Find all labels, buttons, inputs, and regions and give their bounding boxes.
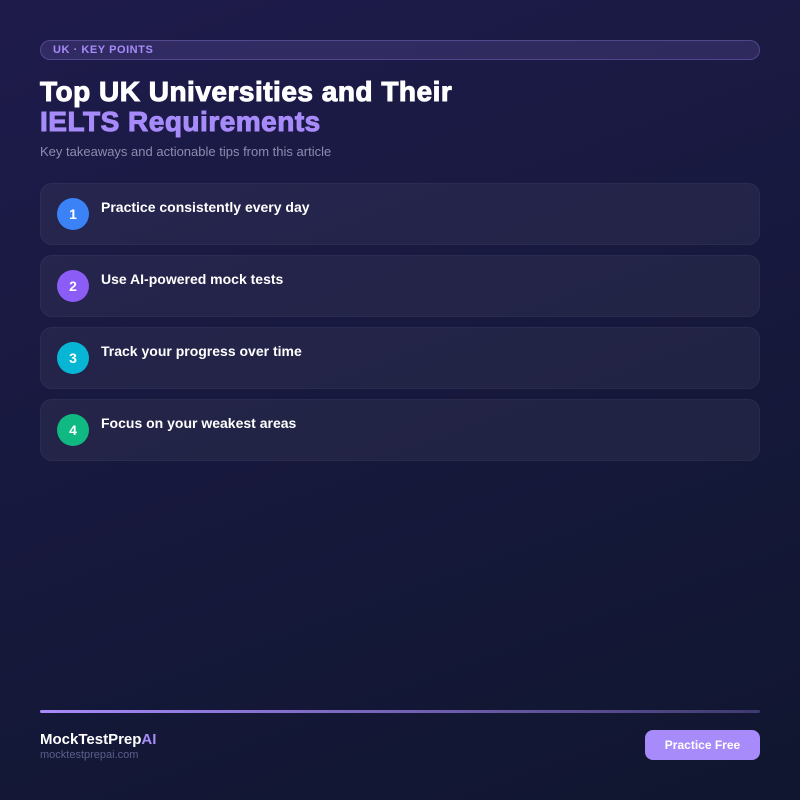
footer accent bar xyxy=(40,710,760,713)
footer brand xyxy=(40,731,156,761)
badge: UK key points: UK · KEY POINTS xyxy=(53,44,153,56)
card: point 1 xyxy=(40,183,760,245)
number badge 3: 3 xyxy=(69,350,77,366)
card: point 4 xyxy=(40,399,760,461)
point 3 text: Track your progress over time xyxy=(101,343,302,359)
number badge 4: 4 xyxy=(69,422,77,438)
badge: UK key points xyxy=(40,40,760,60)
title: IELTS Requirements xyxy=(40,106,321,137)
card: point 3 xyxy=(40,327,760,389)
button: Practice Free xyxy=(645,730,760,760)
number badge 4 xyxy=(57,414,89,446)
number badge 2: 2 xyxy=(69,278,77,294)
subtitle: Key takeaways and actionable tips from this article xyxy=(40,144,331,159)
brand url: mocktestprepai.com xyxy=(40,749,138,761)
point 4 text: Focus on your weakest areas xyxy=(101,415,296,431)
title: Top UK Universities and Their xyxy=(40,76,452,107)
number badge 1 xyxy=(57,198,89,230)
button: Practice Free: Practice Free xyxy=(665,738,740,752)
point 2 text: Use AI-powered mock tests xyxy=(101,271,283,287)
brand name: MockTestPrepAI xyxy=(40,731,156,748)
number badge 3 xyxy=(57,342,89,374)
title xyxy=(40,76,452,138)
number badge 1: 1 xyxy=(69,206,77,222)
point 1 text: Practice consistently every day xyxy=(101,199,310,215)
number badge 2 xyxy=(57,270,89,302)
card: point 2 xyxy=(40,255,760,317)
